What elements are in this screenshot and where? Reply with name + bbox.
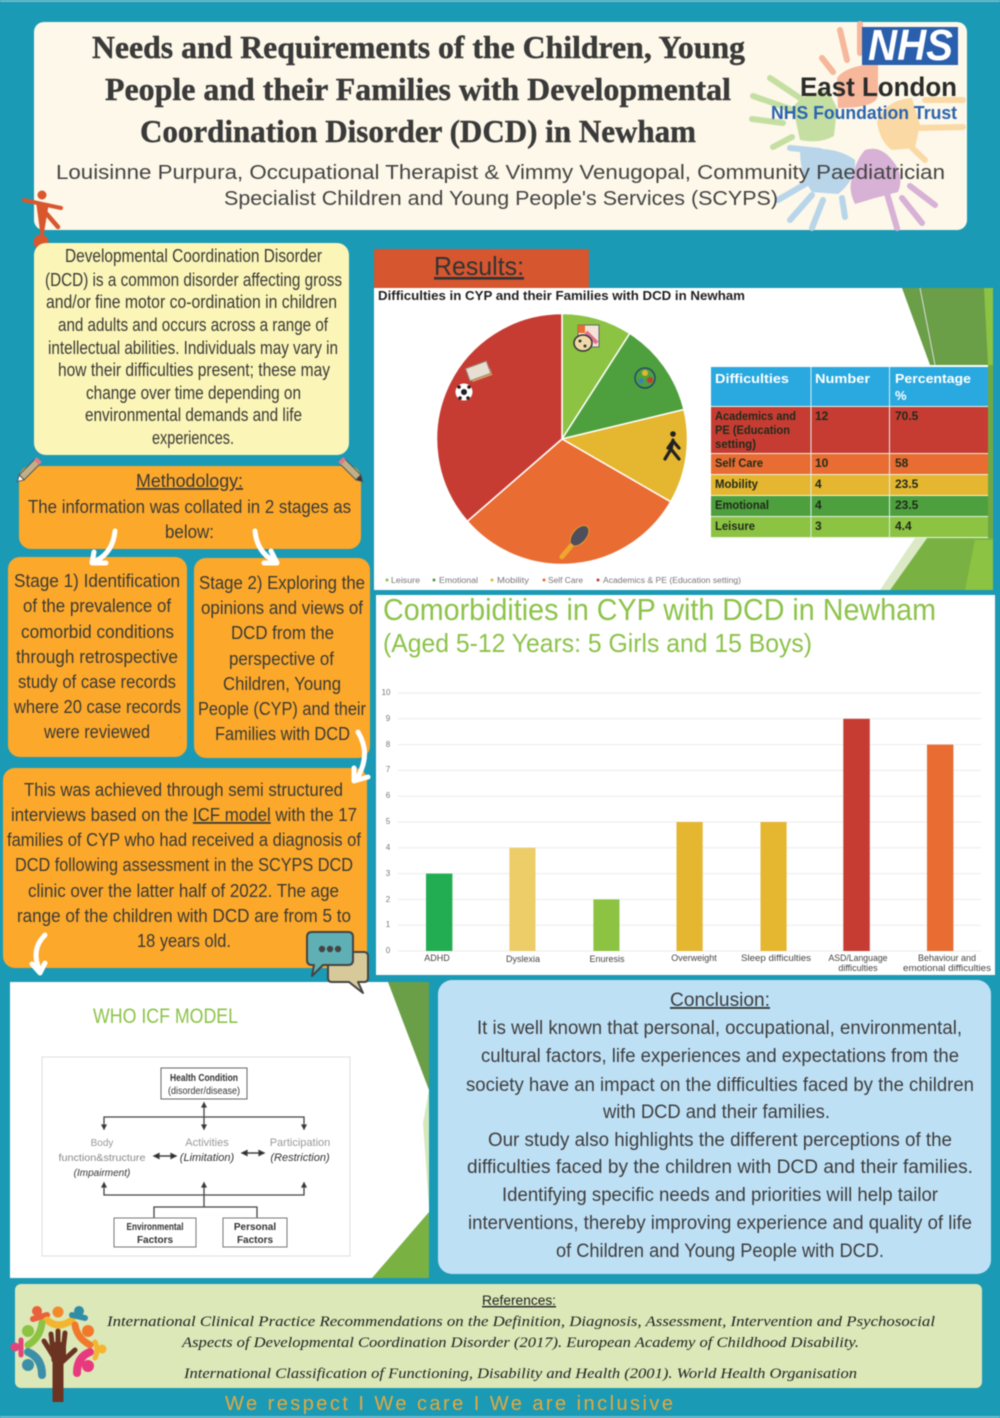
box: health condition: Health Condition bbox=[170, 1073, 238, 1084]
panel: interviews: DCD following assessment in the SCYPS DCD bbox=[15, 855, 353, 875]
box: health condition: (disorder/disease) bbox=[168, 1086, 240, 1097]
table: difficulties: 23.5 bbox=[895, 477, 919, 491]
icon: walking person bbox=[665, 431, 679, 459]
ICF components: (Restriction) bbox=[270, 1152, 330, 1164]
x axis labels: Sleep difficulties bbox=[741, 953, 812, 963]
table: difficulties: 4 bbox=[815, 477, 822, 491]
panel: conclusion: Conclusion: bbox=[670, 990, 770, 1011]
ICF components: function&structure bbox=[58, 1153, 146, 1164]
legend: Mobility bbox=[497, 576, 529, 585]
ICF components: Body bbox=[91, 1138, 113, 1149]
icon: palette bbox=[574, 325, 599, 351]
decorative facets bbox=[372, 982, 429, 1278]
panel: conclusion: difficulties faced by the children with DCD and their families. bbox=[467, 1157, 973, 1178]
decorative facets bbox=[880, 288, 993, 590]
chart title: Difficulties in CYP and their Families with DCD in Newham bbox=[378, 288, 745, 303]
panel: stage 2: perspective of bbox=[229, 649, 335, 669]
panel: DCD definition: environmental demands and life bbox=[85, 405, 302, 425]
panel: conclusion: with DCD and their families. bbox=[602, 1102, 830, 1123]
panel: stage 1: through retrospective bbox=[16, 647, 178, 667]
icon: coloured hand prints bbox=[752, 24, 963, 228]
panel: methodology: below: bbox=[165, 522, 214, 542]
panel: conclusion: of Children and Young People with DCD. bbox=[556, 1241, 884, 1262]
panel: conclusion: Identifying specific needs and priorities will help tailor bbox=[502, 1185, 939, 1206]
icon: hairbrush bbox=[555, 522, 593, 563]
panel: interviews: interviews based on the ICF model with the 17 bbox=[11, 805, 357, 825]
table: difficulties: % bbox=[895, 388, 907, 403]
panel: stage 2: opinions and views of bbox=[201, 598, 364, 618]
title: Coordination Disorder (DCD) in Newham bbox=[140, 113, 696, 149]
x axis labels: ADHD bbox=[424, 953, 450, 963]
x axis labels: Overweight bbox=[671, 953, 717, 963]
y axis labels: 3 bbox=[386, 869, 391, 878]
table: difficulties: Leisure bbox=[715, 519, 755, 533]
ICF heading: WHO ICF MODEL bbox=[93, 1005, 238, 1028]
box: personal factors bbox=[223, 1218, 287, 1247]
panel: references: Aspects of Developmental Coordination Disorder (2017). European Academy of Childhood Disability. bbox=[181, 1335, 859, 1351]
panel: DCD definition: and adults and occurs across a range of bbox=[58, 315, 329, 335]
panel: interviews: families of CYP who had received a diagnosis of bbox=[7, 830, 362, 850]
table: difficulties: Emotional bbox=[715, 498, 769, 512]
panel: conclusion: interventions, thereby improving experience and quality of life bbox=[468, 1213, 972, 1234]
ICF components: Participation bbox=[270, 1137, 330, 1149]
panel: DCD definition: and/or fine motor co-ordination in children bbox=[46, 292, 337, 312]
panel: conclusion: cultural factors, life experiences and expectations from the bbox=[481, 1046, 959, 1067]
panel: interviews: 18 years old. bbox=[137, 931, 231, 951]
heading: results bbox=[374, 249, 589, 288]
icon: pencil right bbox=[338, 457, 365, 484]
panel: stage 1: comorbid conditions bbox=[21, 622, 174, 642]
NHS logo: East London bbox=[800, 72, 957, 102]
panel: interviews: range of the children with DCD are from 5 to bbox=[17, 906, 351, 926]
panel: DCD definition: Developmental Coordination Disorder bbox=[65, 246, 322, 266]
arrow: to ICF model bbox=[32, 935, 45, 973]
table: difficulties bbox=[711, 367, 988, 538]
legend bbox=[386, 576, 741, 585]
bars bbox=[426, 719, 953, 951]
panel: stage 1: Stage 1) Identification bbox=[14, 571, 180, 591]
panel: stage 1: study of case records bbox=[18, 672, 176, 692]
table: difficulties: Self Care bbox=[715, 456, 763, 470]
NHS logo: NHS bbox=[868, 21, 953, 70]
ICF components bbox=[58, 1137, 330, 1179]
panel: methodology bbox=[19, 466, 361, 549]
box: environmental factors: Environmental bbox=[126, 1222, 184, 1233]
connector arrows bbox=[102, 1103, 306, 1218]
pie chart bbox=[437, 314, 688, 564]
y axis labels: 10 bbox=[382, 688, 391, 697]
table: difficulties: 4 bbox=[815, 498, 822, 512]
panel: stage 2: Stage 2) Exploring the bbox=[199, 573, 365, 593]
authors: Louisinne Purpura, Occupational Therapist & Vimmy Venugopal, Community Paediatrician bbox=[56, 162, 945, 184]
tagline: We respect I We care I We are inclusive bbox=[225, 1393, 673, 1415]
panel: stage 1: were reviewed bbox=[43, 722, 150, 742]
y axis labels: 7 bbox=[386, 765, 391, 774]
panel: methodology: The information was collated in 2 stages as bbox=[28, 497, 351, 517]
panel: stage 1 bbox=[8, 557, 187, 757]
table: difficulties: Number bbox=[815, 371, 870, 386]
panel: DCD definition: (DCD) is a common disorder affecting gross bbox=[45, 270, 342, 290]
panel: interviews: clinic over the latter half of 2022. The age bbox=[28, 881, 339, 901]
title: People and their Families with Developmental bbox=[105, 71, 731, 107]
table: difficulties: 12 bbox=[815, 409, 829, 423]
icon: pencil left bbox=[15, 457, 42, 484]
panel: stage 1: of the prevalence of bbox=[23, 596, 172, 616]
y axis labels: 0 bbox=[386, 946, 391, 955]
panel: DCD definition: change over time depending on bbox=[86, 383, 301, 403]
ICF components: (Impairment) bbox=[74, 1168, 130, 1179]
table: difficulties: Academics and bbox=[715, 409, 796, 423]
x axis labels: Behaviour and bbox=[918, 953, 976, 963]
panel: references: International Clinical Practice Recommendations on the Definition, Diagnosis, Assessment, Intervention and Psychosocial bbox=[106, 1314, 935, 1330]
box: environmental factors bbox=[114, 1218, 196, 1247]
arrow: to stage 1 bbox=[92, 531, 115, 563]
table: difficulties: Mobility bbox=[715, 477, 758, 491]
panel: conclusion: Our study also highlights the different perceptions of the bbox=[488, 1130, 952, 1151]
panel: references: References: bbox=[482, 1292, 556, 1308]
panel: DCD definition: experiences. bbox=[152, 428, 234, 448]
panel: DCD definition: intellectual abilities. Individuals may vary in bbox=[48, 338, 338, 358]
panel: stage 1: where 20 case records bbox=[13, 697, 181, 717]
icon: emotions circle bbox=[635, 368, 655, 388]
y axis labels: 9 bbox=[386, 714, 391, 723]
x axis labels: emotional difficulties bbox=[903, 963, 992, 973]
NHS logo bbox=[771, 21, 958, 123]
ICF components: (Limitation) bbox=[180, 1152, 235, 1164]
table: difficulties: Difficulties bbox=[715, 371, 789, 386]
table: difficulties: 23.5 bbox=[895, 498, 919, 512]
authors: Specialist Children and Young People's Services (SCYPS) bbox=[224, 188, 778, 210]
icon: running figure bbox=[24, 190, 61, 250]
panel: DCD definition bbox=[34, 243, 349, 455]
panel: stage 2: Children, Young bbox=[223, 674, 341, 694]
table: difficulties: 4.4 bbox=[895, 519, 912, 533]
panel: conclusion: society have an impact on the difficulties faced by the children bbox=[466, 1075, 974, 1096]
box: personal factors: Personal bbox=[234, 1222, 276, 1233]
heading: results: Results: bbox=[434, 251, 524, 281]
panel: interviews bbox=[3, 768, 367, 968]
arrow: to stage 2 bbox=[255, 531, 277, 563]
x axis labels: Enuresis bbox=[589, 954, 625, 964]
icon: books bbox=[466, 361, 492, 383]
panel: comorbidities chart bbox=[376, 592, 995, 975]
box: health condition bbox=[161, 1068, 247, 1099]
x axis labels: ASD/Language bbox=[828, 953, 888, 963]
y axis labels: 1 bbox=[386, 920, 391, 929]
panel: stage 2 bbox=[194, 558, 370, 758]
y axis labels bbox=[382, 688, 391, 955]
ICF diagram bbox=[42, 1057, 350, 1256]
table: difficulties: 58 bbox=[895, 456, 909, 470]
table: difficulties: 10 bbox=[815, 456, 829, 470]
x axis labels bbox=[424, 953, 992, 973]
chart heading bbox=[383, 592, 936, 658]
y axis labels: 2 bbox=[386, 895, 391, 904]
panel: difficulties pie and table bbox=[374, 288, 993, 590]
x axis labels: difficulties bbox=[838, 963, 878, 973]
y axis labels: 5 bbox=[386, 817, 391, 826]
icon: speech bubbles bbox=[307, 932, 368, 993]
panel: references: International Classification of Functioning, Disability and Health (2001). World Health Organisation bbox=[183, 1366, 857, 1382]
table: difficulties: PE (Education bbox=[715, 423, 790, 437]
title: Needs and Requirements of the Children, Young bbox=[92, 29, 745, 65]
panel: stage 2: People (CYP) and their bbox=[198, 699, 366, 719]
panel: methodology: Methodology: bbox=[136, 471, 243, 491]
header panel bbox=[34, 21, 967, 230]
y axis labels: 8 bbox=[386, 740, 391, 749]
panel: conclusion bbox=[438, 980, 991, 1274]
panel: interviews: This was achieved through semi structured bbox=[24, 780, 343, 800]
panel: stage 2: DCD from the bbox=[231, 623, 334, 643]
y axis labels: 4 bbox=[386, 843, 391, 852]
chart heading: Comorbidities in CYP with DCD in Newham bbox=[383, 592, 936, 627]
panel: conclusion: It is well known that personal, occupational, environmental, bbox=[477, 1018, 962, 1039]
legend: Academics & PE (Education setting) bbox=[603, 576, 741, 585]
panel: DCD definition: how their difficulties present; these may bbox=[58, 360, 330, 380]
panel: references bbox=[15, 1284, 982, 1388]
authors bbox=[56, 162, 945, 210]
table: difficulties: setting) bbox=[715, 437, 756, 451]
box: personal factors: Factors bbox=[237, 1235, 273, 1246]
y axis labels: 6 bbox=[386, 791, 391, 800]
x axis labels: Dyslexia bbox=[506, 954, 540, 964]
legend: Leisure bbox=[391, 576, 421, 585]
NHS logo: NHS Foundation Trust bbox=[771, 103, 957, 123]
chart heading: (Aged 5-12 Years: 5 Girls and 15 Boys) bbox=[383, 628, 812, 658]
panel: WHO ICF model bbox=[10, 982, 429, 1278]
legend: Self Care bbox=[548, 576, 584, 585]
table: difficulties: 70.5 bbox=[895, 409, 919, 423]
table: difficulties: 3 bbox=[815, 519, 822, 533]
ICF components: Activities bbox=[185, 1137, 229, 1149]
table: difficulties: Percentage bbox=[895, 371, 971, 386]
panel: stage 2: Families with DCD bbox=[215, 724, 350, 744]
title bbox=[92, 29, 745, 149]
icon: football bbox=[456, 384, 472, 400]
icon: tree of people bbox=[10, 1306, 106, 1402]
legend: Emotional bbox=[439, 576, 478, 585]
box: environmental factors: Factors bbox=[137, 1235, 173, 1246]
arrow: to interviews bbox=[354, 732, 368, 781]
